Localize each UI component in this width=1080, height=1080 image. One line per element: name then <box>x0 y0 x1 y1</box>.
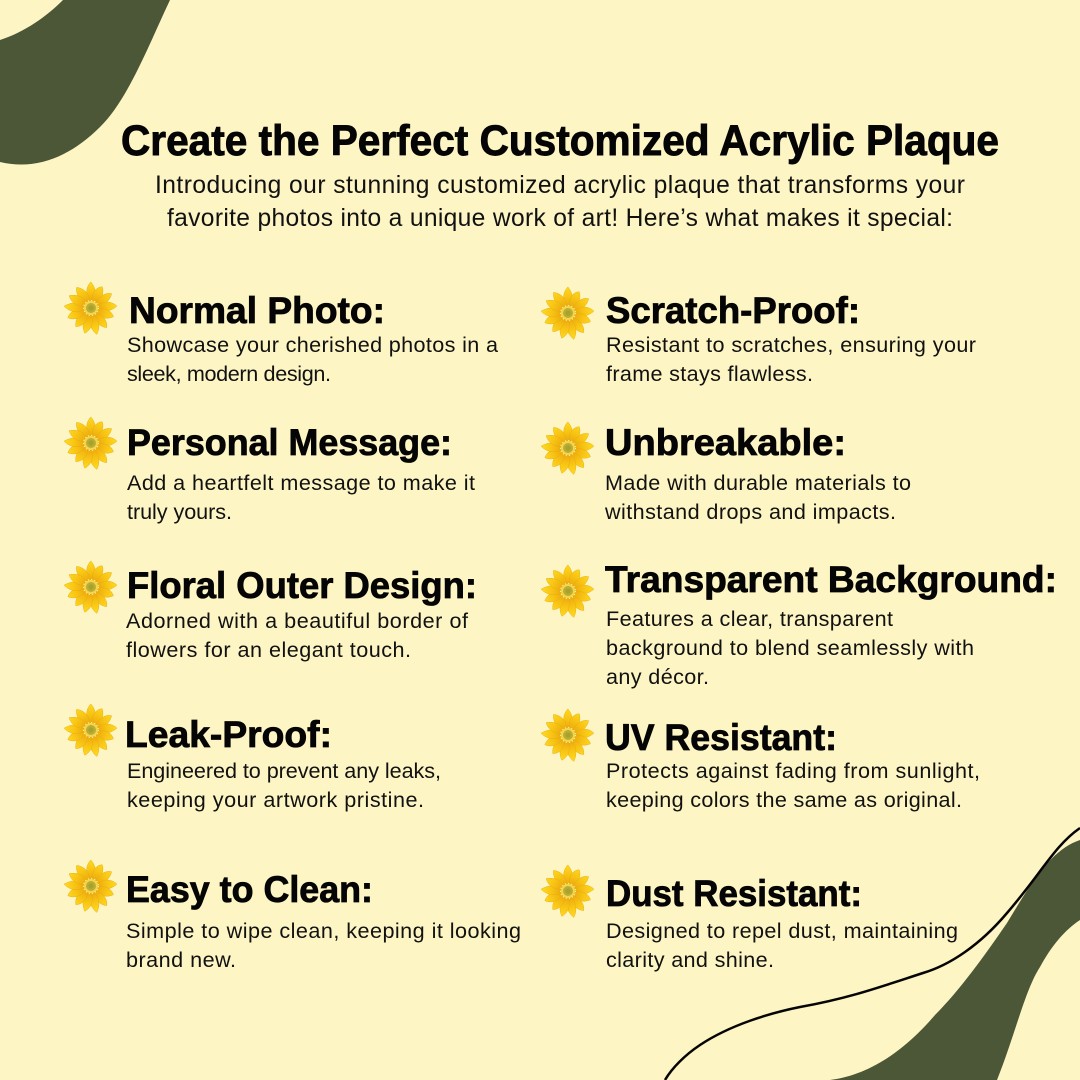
description: Unbreakable: Made with durable materials to <box>605 470 911 495</box>
description: Normal Photo: Showcase your cherished photos in a <box>127 332 499 357</box>
description: Dust Resistant: Designed to repel dust, maintaining <box>606 918 958 943</box>
description: Dust Resistant: clarity and shine. <box>606 947 774 972</box>
icon: flower <box>541 865 594 918</box>
icon: flower <box>541 287 594 340</box>
description: Unbreakable <box>604 470 911 524</box>
description: Scratch-Proof <box>606 332 976 386</box>
feature: Leak-Proof <box>64 704 441 812</box>
icon: flower <box>541 422 594 475</box>
feature: Transparent Background <box>541 559 1057 689</box>
decorative green blob: bottom right <box>830 840 1080 1080</box>
description: Transparent Background: background to blend seamlessly with <box>606 635 974 660</box>
icon: flower <box>64 282 117 335</box>
description: UV Resistant <box>606 758 980 812</box>
description: UV Resistant: keeping colors the same as original. <box>606 787 962 812</box>
feature: Personal Message <box>64 417 475 524</box>
description: Unbreakable: withstand drops and impacts. <box>604 499 896 524</box>
description: Transparent Background <box>606 606 974 689</box>
heading: Dust Resistant: Dust Resistant: <box>606 873 862 914</box>
feature: Normal Photo <box>64 282 499 386</box>
description: Normal Photo <box>127 332 499 386</box>
description: Leak-Proof <box>127 758 441 812</box>
heading: Transparent Background: Transparent Background: <box>605 559 1057 600</box>
heading: Leak-Proof: Leak-Proof: <box>125 714 332 755</box>
description: Scratch-Proof: frame stays flawless. <box>606 361 813 386</box>
description: Floral Outer Design: flowers for an elegant touch. <box>126 637 411 662</box>
intro text: favorite photos into a unique work of art! Here’s what makes it special: <box>167 205 953 232</box>
description: Personal Message <box>127 470 475 524</box>
description: Easy to Clean: brand new. <box>126 947 236 972</box>
description: Scratch-Proof: Resistant to scratches, ensuring your <box>606 332 976 357</box>
description: Personal Message: Add a heartfelt message to make it <box>127 470 475 495</box>
feature: Scratch-Proof <box>541 287 976 386</box>
decorative black curve: bottom right <box>665 828 1080 1080</box>
description: Personal Message: truly yours. <box>127 499 232 524</box>
description: UV Resistant: Protects against fading from sunlight, <box>606 758 980 783</box>
description: Floral Outer Design: Adorned with a beautiful border of <box>126 608 469 633</box>
icon: flower <box>64 860 117 913</box>
feature: Unbreakable <box>541 422 911 524</box>
heading: UV Resistant: UV Resistant: <box>605 717 837 758</box>
icon: flower <box>64 704 117 757</box>
description: Transparent Background: Features a clear, transparent <box>606 606 893 631</box>
description: Floral Outer Design <box>126 608 469 662</box>
feature: Easy to Clean <box>64 860 521 972</box>
feature: Floral Outer Design <box>64 561 477 662</box>
description: Easy to Clean <box>126 918 521 972</box>
heading: Personal Message: Personal Message: <box>127 422 452 463</box>
intro text: Introducing our stunning customized acrylic plaque that transforms your <box>155 172 965 199</box>
heading: Easy to Clean: Easy to Clean: <box>126 869 373 910</box>
title: Create the Perfect Customized Acrylic Plaque <box>121 117 999 165</box>
description: Normal Photo: sleek, modern design. <box>127 361 331 386</box>
description: Leak-Proof: keeping your artwork pristine. <box>127 787 424 812</box>
heading: Scratch-Proof: Scratch-Proof: <box>606 290 860 331</box>
heading: Unbreakable: Unbreakable: <box>605 422 846 463</box>
heading: Normal Photo: Normal Photo: <box>129 290 385 331</box>
description: Easy to Clean: Simple to wipe clean, keeping it looking <box>126 918 521 943</box>
icon: flower <box>541 565 594 618</box>
intro text <box>155 172 965 232</box>
heading: Floral Outer Design: Floral Outer Design: <box>127 565 477 606</box>
icon: flower <box>541 709 594 762</box>
decorative green blob: top left <box>0 0 170 165</box>
feature: UV Resistant <box>541 709 980 812</box>
icon: flower <box>64 561 117 614</box>
feature: Dust Resistant <box>541 865 958 972</box>
description: Transparent Background: any décor. <box>606 664 709 689</box>
description: Leak-Proof: Engineered to prevent any leaks, <box>127 758 441 783</box>
description: Dust Resistant <box>606 918 958 972</box>
icon: flower <box>64 417 117 470</box>
